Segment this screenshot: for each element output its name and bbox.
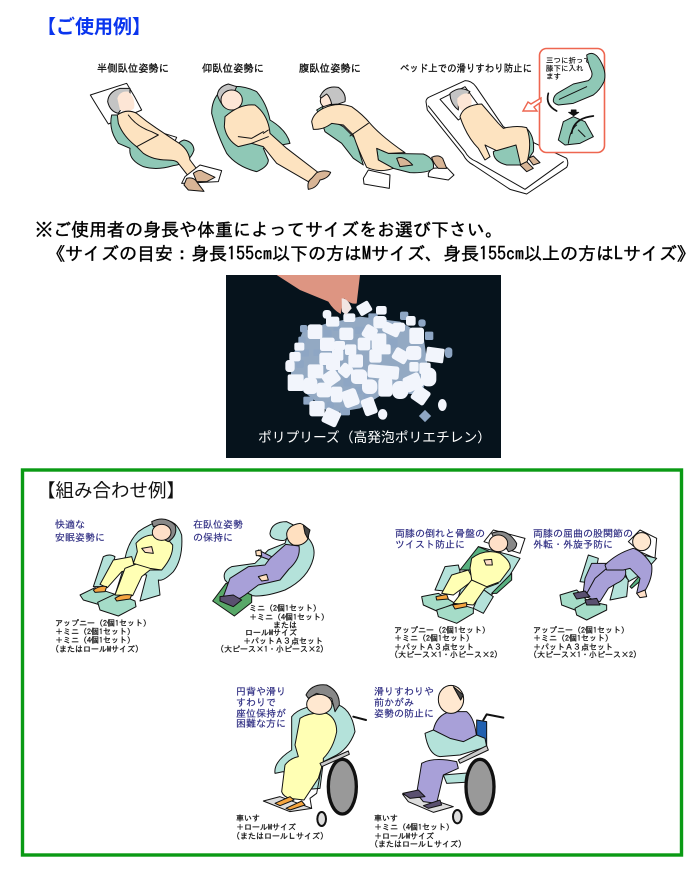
photo: polypropylene pellets bbox=[226, 275, 501, 458]
hand: fingers dropping pellets bbox=[277, 275, 360, 314]
example: preventing knee collapse and pelvic twist: アップニー（2個1セット） bbox=[394, 625, 490, 634]
example: comfortable sleeping posture: アップニー（2個1セット） bbox=[55, 618, 151, 627]
example: preventing knee collapse and pelvic twist bbox=[394, 528, 525, 658]
example: wheelchair, difficulty keeping seated posture bbox=[236, 685, 366, 840]
example: maintaining lying posture: ミニ（2個1セット） bbox=[249, 604, 321, 612]
usage label: prone position: 腹臥位姿勢に bbox=[299, 62, 361, 74]
example: preventing hip abduction and rotation: (大ピース×1・小ピース×2) bbox=[533, 650, 637, 658]
example: wheelchair, difficulty keeping seated posture: すわりで bbox=[236, 698, 276, 708]
example: maintaining lying posture: または bbox=[273, 621, 297, 629]
arrow: callout pointer bbox=[523, 98, 541, 111]
example: preventing knee collapse and pelvic twist: 両膝の倒れと骨盤の bbox=[395, 528, 485, 539]
example: wheelchair, difficulty keeping seated posture: 車いす bbox=[236, 814, 260, 822]
illustration: semi-lateral position bbox=[90, 83, 222, 191]
example: wheelchair, preventing sliding and forward lean: (またはロールＬサイズ) bbox=[374, 840, 462, 848]
example: maintaining lying posture: 在臥位姿勢 bbox=[193, 519, 243, 530]
example: preventing hip abduction and rotation: 外転・外旋予防に bbox=[533, 539, 613, 550]
illustration: supine position bbox=[212, 84, 331, 189]
example: wheelchair, preventing sliding and forward lean: 姿勢の防止に bbox=[374, 708, 434, 719]
example: wheelchair, preventing sliding and forward lean: 滑りすわりや bbox=[374, 687, 434, 697]
example: preventing hip abduction and rotation bbox=[533, 528, 657, 658]
example: comfortable sleeping posture: ＋ミニ（2個1セット） bbox=[55, 628, 135, 636]
heading: combination examples: 【組み合わせ例】 bbox=[37, 480, 185, 501]
example: preventing hip abduction and rotation: ＋パットＡ３点セット bbox=[533, 643, 613, 651]
example: comfortable sleeping posture: 安眠姿勢に bbox=[55, 532, 105, 543]
example: wheelchair, preventing sliding and forward lean: 前かがみ bbox=[374, 697, 414, 708]
example: maintaining lying posture: (大ピース×1・小ピース×2) bbox=[220, 645, 324, 653]
usage label: supine position: 仰臥位姿勢に bbox=[202, 62, 264, 74]
example: wheelchair, difficulty keeping seated posture: 困難な方に bbox=[236, 719, 286, 729]
example: comfortable sleeping posture: 快適な bbox=[55, 520, 85, 530]
example: comfortable sleeping posture: (またはロールMサイズ) bbox=[55, 645, 139, 653]
callout: folding instructions: 三つに折って bbox=[546, 56, 591, 65]
example: maintaining lying posture: ＋ミニ（4個1セット） bbox=[249, 613, 329, 621]
example: preventing knee collapse and pelvic twist: ＋パットＡ３点セット bbox=[394, 643, 474, 651]
size note line 1: ※ご使用者の身長や体重によってサイズをお選び下さい。 bbox=[35, 220, 503, 239]
example: wheelchair, difficulty keeping seated posture: 円背や滑り bbox=[236, 687, 286, 697]
illustration: bed position bbox=[426, 81, 568, 194]
heading: usage examples: 【ご使用例】 bbox=[37, 15, 151, 38]
example: preventing knee collapse and pelvic twist: ツイスト防止に bbox=[395, 540, 465, 550]
example: maintaining lying posture: ロールMサイズ bbox=[245, 628, 297, 636]
usage label: preventing sliding on bed: ベッド上での滑りすわり防止に bbox=[400, 63, 532, 74]
panel: combination examples bbox=[22, 470, 682, 855]
size note line 2: 《サイズの目安：身長155cm以下の方はMサイズ、身長155cm以上の方はLサイズ》 bbox=[47, 244, 695, 263]
callout: folding instructions: ます bbox=[546, 72, 561, 80]
example: maintaining lying posture bbox=[193, 519, 329, 653]
example: wheelchair, preventing sliding and forward lean: ＋ロールMサイズ bbox=[374, 832, 434, 840]
callout: folding instructions: 膝下に入れ bbox=[546, 64, 584, 73]
photo caption: ポリプリーズ（高発泡ポリエチレン） bbox=[258, 429, 491, 445]
example: preventing hip abduction and rotation: アップニー（2個1セット） bbox=[533, 625, 629, 634]
example: comfortable sleeping posture: ＋ミニ（4個1セット） bbox=[55, 636, 135, 644]
callout: folding instructions bbox=[523, 48, 605, 152]
example: preventing knee collapse and pelvic twist: (大ピース×1・小ピース×2) bbox=[394, 650, 498, 658]
example: preventing knee collapse and pelvic twist: ＋ミニ（2個1セット） bbox=[394, 634, 474, 642]
example: preventing hip abduction and rotation: ＋ミニ（2個1セット） bbox=[533, 634, 613, 642]
example: wheelchair, difficulty keeping seated posture: (またはロールＬサイズ) bbox=[236, 832, 324, 840]
example: wheelchair, preventing sliding and forward lean: 車いす bbox=[374, 814, 398, 822]
example: maintaining lying posture: の保持に bbox=[193, 532, 233, 543]
example: wheelchair, preventing sliding and forward lean: ＋ミニ（4個1セット） bbox=[374, 823, 454, 831]
example: maintaining lying posture: ＋パットＡ３点セット bbox=[243, 637, 323, 645]
example: comfortable sleeping posture bbox=[55, 519, 182, 653]
example: preventing hip abduction and rotation: 両膝の屈曲の股関節の bbox=[533, 528, 633, 539]
example: wheelchair, difficulty keeping seated posture: ＋ロールMサイズ bbox=[236, 823, 296, 831]
usage label: semi-lateral position: 半側臥位姿勢に bbox=[97, 62, 169, 74]
illustration: prone position bbox=[312, 87, 454, 188]
example: wheelchair, difficulty keeping seated posture: 座位保持が bbox=[236, 708, 286, 719]
example: wheelchair, preventing sliding and forward lean bbox=[374, 685, 503, 848]
